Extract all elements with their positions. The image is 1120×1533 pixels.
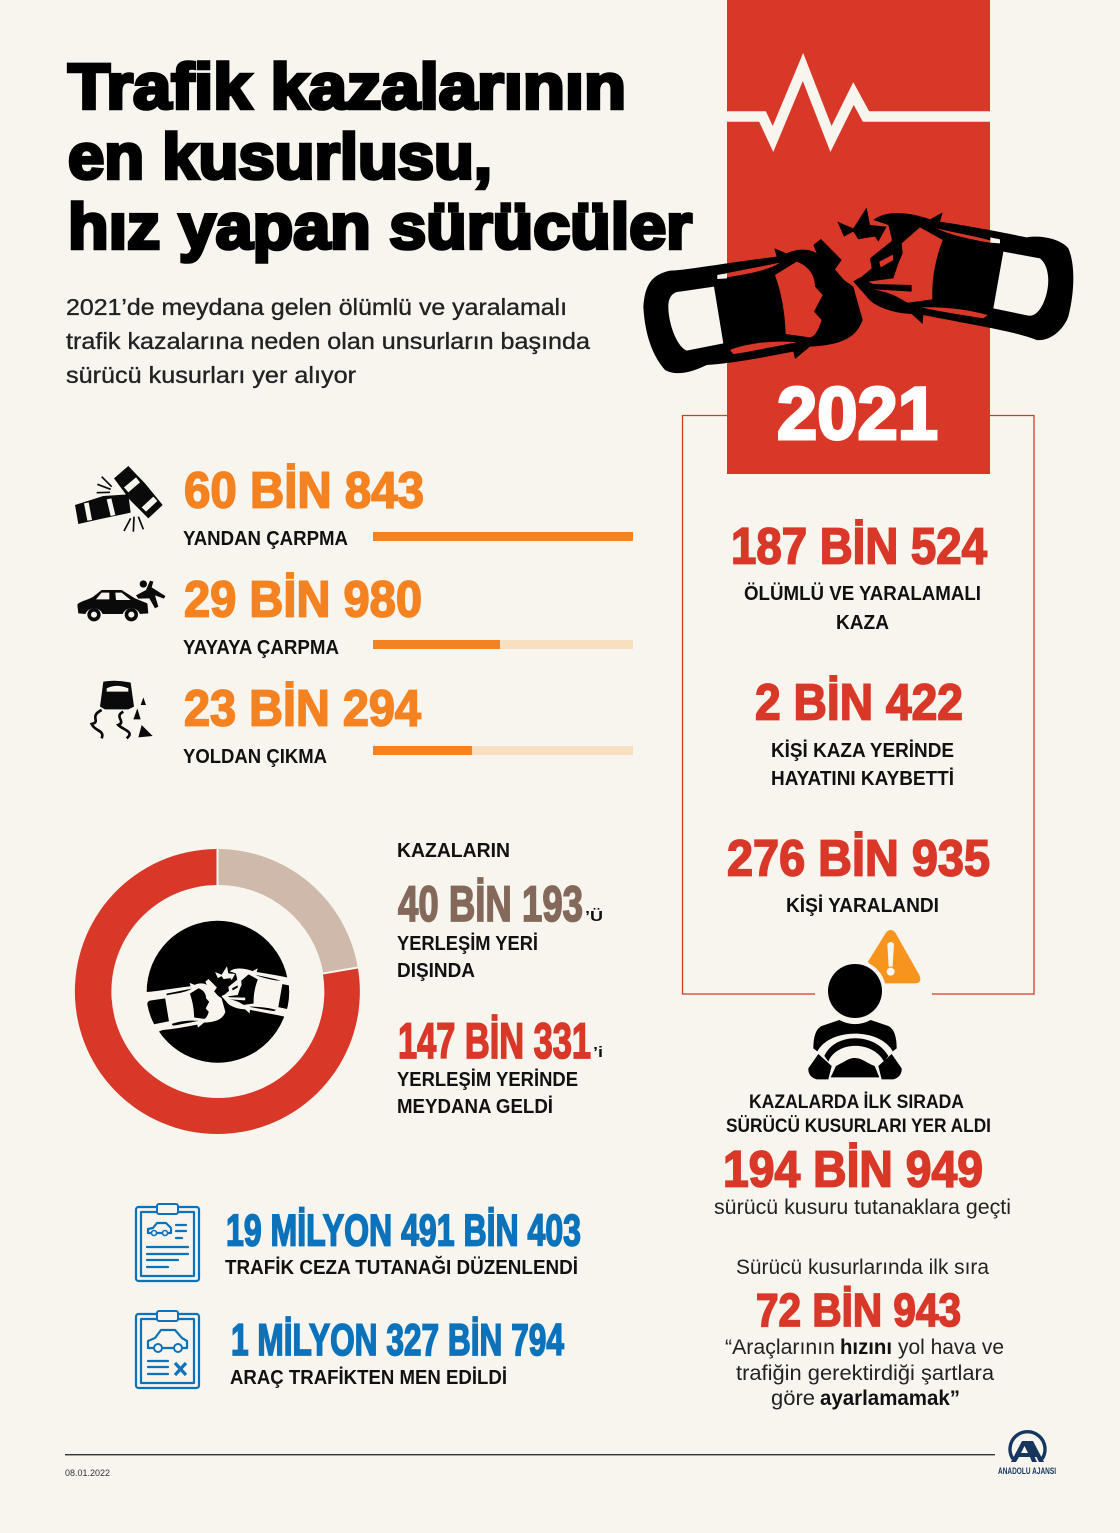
heading: driver faults: SÜRÜCÜ KUSURLARI YER ALDI xyxy=(726,1116,991,1137)
suffix: ’Ü xyxy=(585,908,603,925)
value: 2 BİN 422 xyxy=(755,674,963,730)
title: hız yapan sürücüler xyxy=(68,190,692,262)
icon: crash in circle xyxy=(146,920,290,1063)
location breakdown xyxy=(397,840,603,1118)
icon: skidding car and cones xyxy=(92,681,153,738)
label: MEYDANA GELDİ xyxy=(397,1095,553,1118)
label: KİŞİ YARALANDI xyxy=(786,894,939,917)
heading: KAZALARIN xyxy=(397,840,510,862)
icon: clipboard with car xyxy=(136,1204,199,1281)
heading: driver faults xyxy=(726,1092,991,1137)
footer rule xyxy=(65,1454,995,1455)
icon: clipboard with car and X xyxy=(136,1311,199,1388)
stat: deaths xyxy=(755,674,963,790)
value: 60 BİN 843 xyxy=(184,462,424,518)
value: 1 MİLYON 327 BİN 794 xyxy=(231,1316,564,1365)
quote: yol hava ve xyxy=(898,1336,1004,1359)
quote: trafiğin gerektirdiği şartlara xyxy=(736,1362,994,1385)
label: HAYATINI KAYBETTİ xyxy=(771,767,954,790)
label: DIŞINDA xyxy=(397,960,475,982)
title: en kusurlusu, xyxy=(68,120,492,192)
heading: driver faults: KAZALARDA İLK SIRADA xyxy=(749,1092,964,1113)
label: YAYAYA ÇARPMA xyxy=(183,637,339,659)
intro text: trafik kazalarına neden olan unsurların başında xyxy=(66,328,590,354)
label: YERLEŞİM YERİNDE xyxy=(397,1068,578,1091)
value: 276 BİN 935 xyxy=(727,830,990,886)
intro text: sürücü kusurları yer alıyor xyxy=(66,362,356,388)
quote: “Araçlarının xyxy=(725,1336,835,1359)
quote xyxy=(725,1336,1004,1410)
panel frame: 2021 totals xyxy=(682,416,1034,994)
label: YOLDAN ÇIKMA xyxy=(183,746,327,768)
quote: göre xyxy=(771,1387,815,1410)
value: 187 BİN 524 xyxy=(731,518,988,574)
stat: injured xyxy=(727,830,990,917)
value: 23 BİN 294 xyxy=(184,680,422,736)
label xyxy=(397,932,538,982)
stat: driver fault count: 194 BİN 949 xyxy=(723,1140,983,1198)
stat row: side collision xyxy=(75,462,633,550)
label: YANDAN ÇARPMA xyxy=(183,528,348,550)
label: ÖLÜMLÜ VE YARALAMALI xyxy=(744,582,981,605)
stat: total accidents xyxy=(731,518,988,634)
icon: side collision xyxy=(75,466,163,532)
label xyxy=(744,582,981,634)
label: ARAÇ TRAFİKTEN MEN EDİLDİ xyxy=(230,1366,507,1389)
icon: car hitting pedestrian xyxy=(77,580,165,621)
caption: sürücü kusuru tutanaklara geçti xyxy=(714,1196,1011,1219)
label: YERLEŞİM YERİ xyxy=(397,932,538,955)
label: KİŞİ KAZA YERİNDE xyxy=(771,739,954,762)
bar xyxy=(373,640,633,649)
intro text xyxy=(66,294,590,388)
intro text: 2021’de meydana gelen ölümlü ve yaralamalı xyxy=(66,294,567,320)
value: outside settlements: 40 BİN 193 xyxy=(398,876,583,932)
quote: ayarlamamak” xyxy=(820,1387,960,1410)
title xyxy=(68,50,692,262)
stat: top fault count: 72 BİN 943 xyxy=(756,1284,961,1336)
logo: Anadolu Ajansı: ANADOLU AJANSI xyxy=(998,1466,1056,1476)
red banner xyxy=(727,0,990,474)
crashed cars illustration xyxy=(643,207,1073,373)
date: 08.01.2022 xyxy=(65,1468,110,1479)
title: Trafik kazalarının xyxy=(68,50,626,122)
label xyxy=(397,1068,578,1118)
icon: driver with warning xyxy=(808,930,920,1079)
year 2021: 2021 xyxy=(777,372,938,455)
stat row: pedestrian collision xyxy=(77,570,633,659)
value: inside settlements: 147 BİN 331 xyxy=(398,1013,591,1069)
pulse line xyxy=(727,67,990,139)
value: 29 BİN 980 xyxy=(184,570,422,628)
label xyxy=(771,739,954,790)
stat row: run off road xyxy=(92,680,633,768)
label: TRAFİK CEZA TUTANAĞI DÜZENLENDİ xyxy=(225,1255,578,1279)
label: KAZA xyxy=(836,612,889,634)
stat: traffic tickets xyxy=(136,1204,581,1281)
logo: Anadolu Ajansı xyxy=(998,1432,1056,1476)
donut chart xyxy=(75,849,360,1134)
caption: top fault: Sürücü kusurlarında ilk sıra xyxy=(736,1256,989,1279)
quote: hızını xyxy=(840,1336,892,1359)
bar xyxy=(373,746,633,755)
value: 19 MİLYON 491 BİN 403 xyxy=(226,1206,581,1256)
suffix: ’i xyxy=(593,1044,603,1061)
bar xyxy=(373,532,633,541)
stat: vehicles banned xyxy=(136,1311,564,1389)
